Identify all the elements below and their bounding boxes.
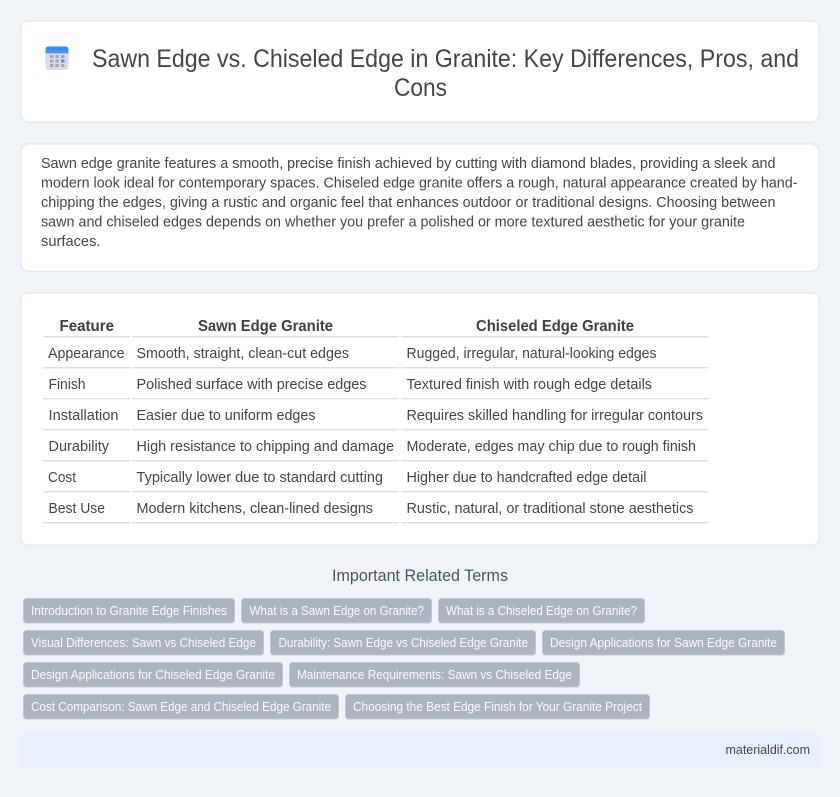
title: Cons (394, 74, 447, 102)
chip: introduction: Introduction to Granite Edge Finishes (31, 604, 227, 618)
row: appearance: Smooth, straight, clean-cut edges (136, 346, 349, 362)
row: cost (48, 470, 646, 486)
text block: introduction (41, 156, 798, 250)
text block: introduction: modern look ideal for contemporary spaces. Chiseled edge granite offers a rough, natural appearance created by hand- (41, 176, 798, 192)
row: cost: Cost (48, 470, 76, 486)
title (92, 45, 799, 102)
table header: Sawn Edge Granite (198, 318, 333, 335)
icon: calendar (46, 46, 68, 70)
chip: choosing finish (346, 694, 650, 719)
row: best use: Modern kitchens, clean-lined designs (136, 501, 373, 517)
panel: introduction (21, 144, 819, 271)
row: appearance: Appearance (48, 346, 124, 362)
chip: visual differences (24, 630, 264, 655)
chip: chiseled edge: What is a Chiseled Edge on Granite? (446, 604, 637, 618)
row: durability (48, 439, 696, 455)
chip: maintenance: Maintenance Requirements: Sawn vs Chiseled Edge (297, 668, 572, 682)
row: appearance: Rugged, irregular, natural-looking edges (406, 346, 656, 362)
panel: comparison table (21, 293, 819, 545)
footer (20, 733, 820, 767)
table header: Chiseled Edge Granite (476, 318, 634, 335)
row: finish: Finish (48, 377, 86, 393)
row: best use: Rustic, natural, or traditional stone aesthetics (406, 501, 694, 517)
footer: materialdif.com (726, 742, 810, 757)
row: installation: Installation (48, 408, 118, 424)
chip: visual differences: Visual Differences: Sawn vs Chiseled Edge (31, 636, 256, 650)
related term chips (24, 598, 784, 719)
title: Sawn Edge vs. Chiseled Edge in Granite: Key Differences, Pros, and (92, 45, 799, 73)
text block: introduction: sawn and chiseled edges depends on whether you prefer a polished or more textured aesthetic for your granite (41, 214, 745, 230)
row: finish: Polished surface with precise edges (136, 377, 366, 393)
row: installation: Requires skilled handling for irregular contours (406, 408, 703, 424)
chip: chiseled applications (24, 662, 282, 687)
table header: Feature (60, 318, 114, 335)
chip: cost comparison (24, 694, 338, 719)
row: durability: Durability (48, 439, 110, 455)
chip: sawn edge: What is a Sawn Edge on Granite? (250, 604, 424, 618)
chip: durability (270, 630, 536, 655)
row: appearance (48, 346, 656, 362)
chip: chiseled applications: Design Applications for Chiseled Edge Granite (31, 668, 275, 682)
chip: durability: Durability: Sawn Edge vs Chiseled Edge Granite (278, 636, 528, 650)
row: installation: Easier due to uniform edges (136, 408, 316, 424)
chip: sawn edge (242, 598, 432, 623)
row: durability: High resistance to chipping and damage (136, 439, 394, 455)
row: cost: Higher due to handcrafted edge detail (406, 470, 646, 486)
text block: introduction: chipping the edges, giving a rustic and organic feel that enhances outdoor or traditional designs. Choosing between (41, 195, 776, 211)
chip: maintenance (290, 662, 580, 687)
table header (60, 318, 634, 335)
chip: introduction (24, 598, 234, 623)
chip: sawn applications: Design Applications for Sawn Edge Granite (550, 636, 777, 650)
row: installation (48, 408, 703, 424)
text block: introduction: surfaces. (41, 234, 100, 250)
row: best use: Best Use (48, 501, 105, 517)
row: finish: Textured finish with rough edge details (406, 377, 652, 393)
chip: cost comparison: Cost Comparison: Sawn Edge and Chiseled Edge Granite (31, 700, 331, 714)
chip: chiseled edge (438, 598, 644, 623)
heading: important related terms: Important Related Terms (332, 567, 508, 585)
row: cost: Typically lower due to standard cutting (136, 470, 383, 486)
row: durability: Moderate, edges may chip due to rough finish (406, 439, 696, 455)
chip: sawn applications (542, 630, 784, 655)
row: best use (48, 501, 694, 517)
panel: header (21, 21, 819, 122)
chip: choosing finish: Choosing the Best Edge Finish for Your Granite Project (353, 700, 642, 714)
row: finish (48, 377, 652, 393)
text block: introduction: Sawn edge granite features a smooth, precise finish achieved by cutting with diamond blades, providing a sleek and (41, 156, 776, 172)
